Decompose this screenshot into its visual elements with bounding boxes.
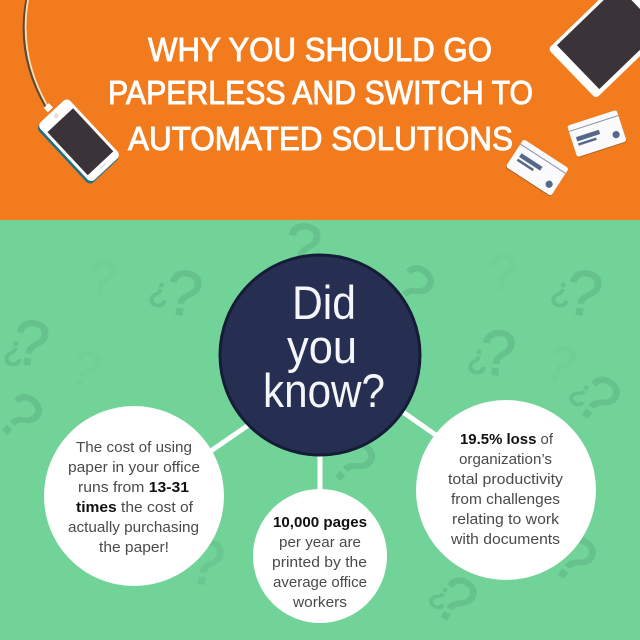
title: AUTOMATED SOLUTIONS bbox=[128, 120, 513, 157]
question mark background pattern: ? bbox=[539, 519, 610, 599]
callout: pages printed: average office bbox=[273, 574, 367, 591]
question mark background pattern: ¿ bbox=[565, 371, 602, 411]
connector: left bbox=[205, 424, 250, 455]
icon: card left bbox=[505, 139, 569, 197]
callout: productivity loss: organization’s bbox=[459, 451, 552, 468]
callout: productivity loss: total productivity bbox=[448, 471, 564, 488]
callout: productivity loss: with documents bbox=[450, 531, 560, 548]
icon: tablet bbox=[548, 0, 640, 99]
question mark background pattern: ? bbox=[560, 255, 608, 332]
central circle: did you know: you bbox=[287, 320, 357, 373]
callout: productivity loss bbox=[416, 400, 596, 580]
question mark background pattern: ? bbox=[563, 359, 634, 439]
question mark background pattern: ? bbox=[182, 524, 230, 601]
question mark background pattern: ¿ bbox=[548, 270, 575, 311]
callout: paper cost: times the cost of bbox=[76, 499, 194, 516]
callout: productivity loss: relating to work bbox=[452, 511, 560, 528]
callout: pages printed: 10,000 pages bbox=[273, 514, 367, 531]
central circle: did you know: Did bbox=[292, 276, 356, 329]
green background panel bbox=[0, 220, 640, 640]
question mark background pattern: ? bbox=[316, 423, 390, 501]
callout: paper cost: actually purchasing bbox=[68, 519, 199, 536]
callout: paper cost: paper in your office bbox=[68, 459, 200, 476]
question mark background pattern: ¿ bbox=[2, 329, 27, 369]
icon: card right bbox=[567, 110, 627, 158]
question mark background pattern: ? bbox=[63, 338, 108, 400]
title: PAPERLESS AND SWITCH TO bbox=[108, 74, 533, 111]
question mark background pattern: ? bbox=[85, 249, 120, 308]
callout: pages printed: workers bbox=[292, 594, 347, 611]
connector: centre bbox=[318, 450, 322, 495]
icon: phone with cable bbox=[24, 0, 122, 186]
callout: paper cost: the paper! bbox=[99, 539, 169, 556]
callout: paper cost: The cost of using bbox=[76, 439, 192, 456]
central circle: did you know bbox=[220, 255, 420, 455]
callout: pages printed: per year are bbox=[279, 534, 361, 551]
question mark background pattern: ? bbox=[489, 245, 517, 301]
title bbox=[108, 31, 533, 157]
question mark background pattern: ? bbox=[538, 333, 583, 395]
callout: pages printed: printed by the bbox=[272, 554, 367, 571]
question mark background pattern bbox=[0, 208, 634, 640]
callout: pages printed bbox=[253, 489, 387, 623]
question mark background pattern: ? bbox=[280, 208, 326, 284]
callout: paper cost bbox=[44, 406, 224, 586]
connector: right bbox=[400, 410, 440, 438]
title: WHY YOU SHOULD GO bbox=[148, 31, 492, 68]
question mark background pattern: ? bbox=[160, 255, 208, 332]
question mark background pattern: ? bbox=[375, 248, 449, 326]
question mark background pattern: ? bbox=[423, 560, 489, 640]
header band bbox=[0, 0, 640, 220]
callout: productivity loss: 19.5% loss of bbox=[460, 431, 554, 448]
question mark background pattern: ? bbox=[477, 316, 519, 390]
question mark background pattern: ? bbox=[8, 305, 54, 381]
central circle: did you know: know? bbox=[263, 364, 385, 417]
callout: paper cost: runs from 13-31 bbox=[78, 479, 189, 496]
callout: productivity loss: from challenges bbox=[451, 491, 560, 508]
question mark background pattern: ¿ bbox=[146, 270, 173, 311]
question mark background pattern: ¿ bbox=[425, 573, 460, 614]
question mark background pattern: ¿ bbox=[466, 337, 490, 377]
